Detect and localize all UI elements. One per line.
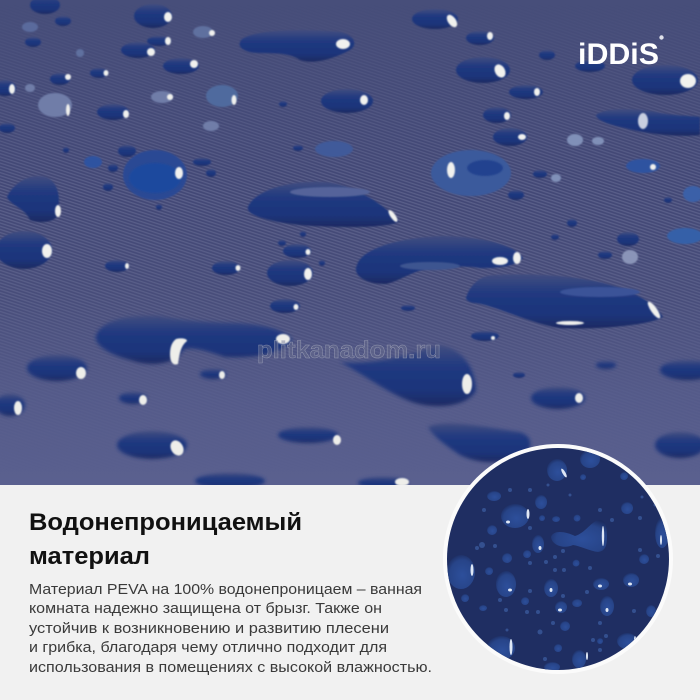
inset circle: close-up of droplets	[443, 444, 673, 674]
large in-focus water puddles	[0, 9, 700, 328]
heading: материал	[29, 543, 150, 570]
logo: iddis: iDDiS	[578, 38, 659, 71]
body text	[29, 582, 432, 676]
out-of-focus foreground drops	[0, 316, 700, 489]
body text: устойчив к возникновению и развитию плесени	[29, 621, 389, 637]
bottom text panel	[0, 485, 700, 700]
fabric-coloured tops of drops and dents	[129, 160, 640, 297]
photo: water drops on blue fabric	[0, 0, 700, 489]
heading	[29, 509, 302, 570]
blurred highlights on foreground drops	[14, 334, 583, 486]
small water droplets	[0, 0, 700, 378]
tiny droplets	[475, 484, 660, 661]
body text: Материал PEVA на 100% водонепроницаем – ванная	[29, 582, 422, 598]
watermark: plitkanadom.ru	[257, 337, 441, 364]
logo: iddis	[580, 35, 664, 64]
close-up highlights	[470, 468, 662, 660]
body text: комната надежно защищена от брызг. Также он	[29, 601, 382, 617]
close-up drops	[447, 450, 669, 672]
heading: Водонепроницаемый	[29, 509, 302, 536]
fabric background	[0, 0, 700, 485]
body text: использования в помещениях с высокой влажностью.	[29, 660, 432, 676]
body text: и грибка, благодаря чему отлично подходит для	[29, 640, 387, 656]
specular highlights on drops	[9, 12, 696, 340]
